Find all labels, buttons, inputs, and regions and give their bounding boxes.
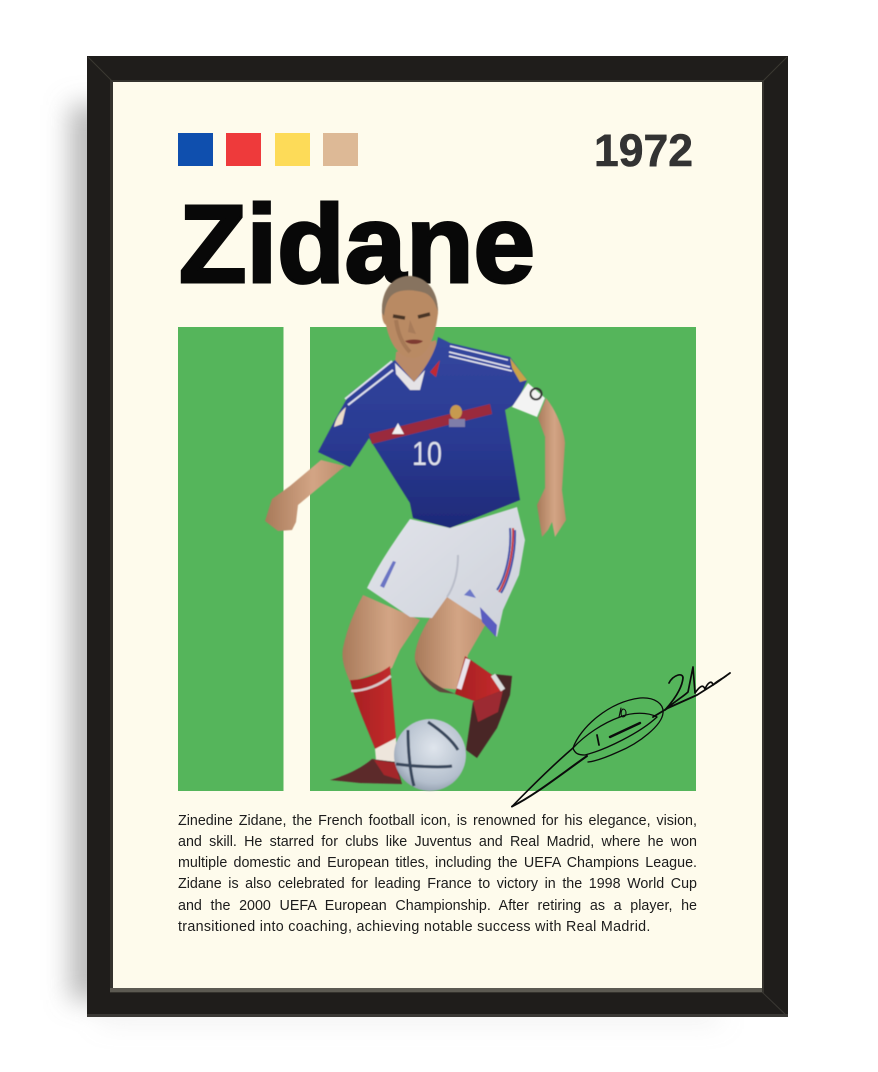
- biography text: and the 2000 UEFA European Championship. After retiring as a player, he: [178, 898, 697, 914]
- neck: [395, 340, 438, 388]
- biography text: Zidane is also celebrated for leading France to victory in the 1998 World Cup: [178, 876, 697, 892]
- football: [394, 719, 466, 791]
- jersey: [318, 337, 527, 528]
- captain armband: [512, 383, 545, 417]
- head: [382, 276, 438, 358]
- biography text: [178, 812, 697, 935]
- right arm: [537, 398, 566, 537]
- poster paper: [113, 82, 762, 988]
- number 10: 10: [412, 435, 442, 472]
- shorts: [367, 507, 525, 637]
- signature: [512, 667, 730, 806]
- title: Zidane: [179, 183, 535, 306]
- biography text: transitioned into coaching, achieving notable success with Real Madrid.: [178, 919, 651, 935]
- back leg: [330, 595, 420, 784]
- biography text: Zinedine Zidane, the French football icon, is renowned for his elegance, vision,: [178, 812, 697, 828]
- left arm: [265, 460, 345, 531]
- adidas logo: [392, 423, 404, 434]
- frame: [87, 56, 788, 1017]
- green panel: right: [310, 327, 696, 791]
- badge: [449, 405, 465, 427]
- birth year: 1972: [594, 125, 693, 176]
- front leg: [415, 596, 512, 758]
- wall shadow: [70, 105, 720, 1022]
- green panel: left: [178, 327, 284, 791]
- player figure: [265, 276, 566, 791]
- colour swatches: [178, 133, 358, 166]
- biography text: and skill. He starred for clubs like Juventus and Real Madrid, where he won: [178, 834, 697, 850]
- biography text: multiple domestic and European titles, including the UEFA Champions League.: [178, 855, 697, 871]
